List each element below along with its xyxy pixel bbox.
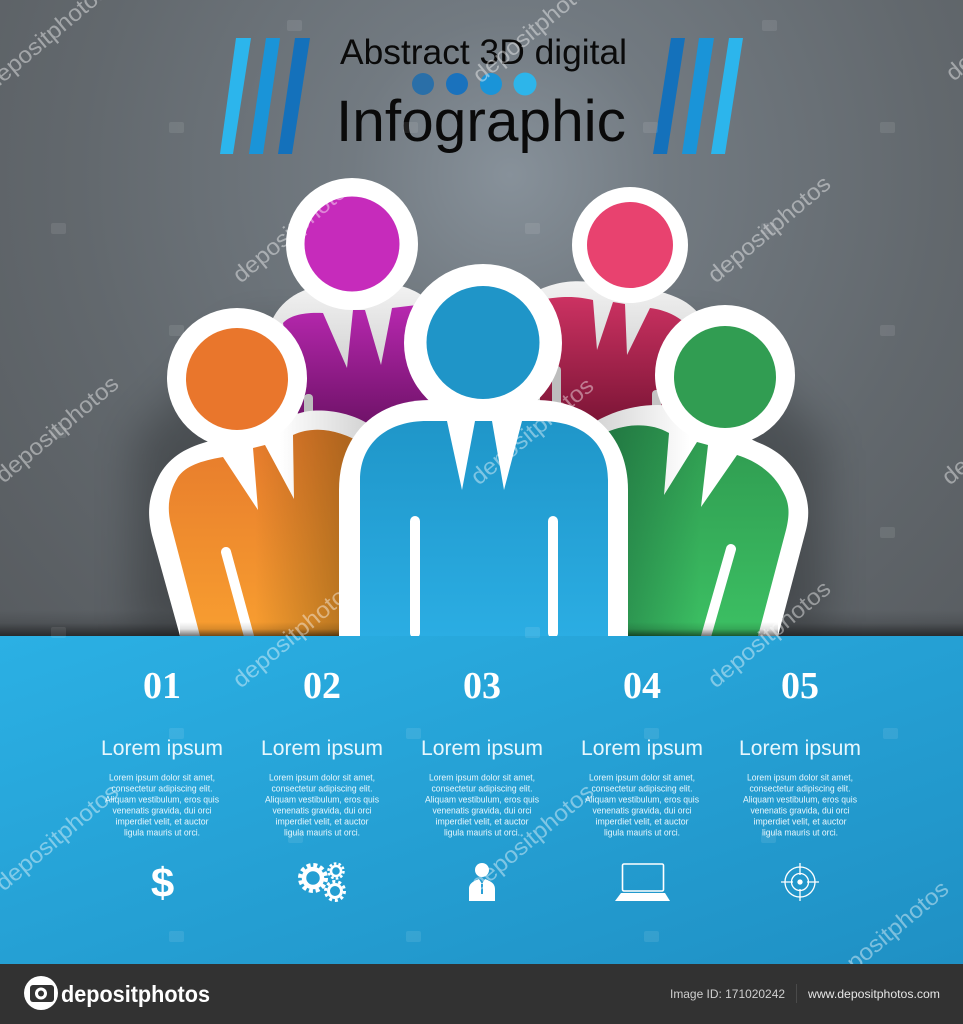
watermark text: depositphotos [227,170,360,288]
column 03: Lorem ipsum dolor sit amet, [429,772,535,784]
heading: right stripes [653,38,743,154]
four dots [412,72,536,96]
column 03: venenatis gravida, dui orci [432,806,532,816]
floor shadow [0,610,963,636]
blue info panel [0,636,963,964]
column 02: Aliquam vestibulum, eros quis [265,794,379,806]
column 05: imperdiet velit, et auctor [754,816,847,828]
column 03: ligula mauris ut orci. [444,828,520,838]
column 01: Lorem ipsum [101,737,223,760]
watermark camera marks [51,20,898,942]
column 05: Lorem ipsum [739,737,861,760]
column 03: Lorem ipsum [421,737,543,760]
column 04: Aliquam vestibulum, eros quis [585,794,699,806]
column 01: imperdiet velit, et auctor [116,816,209,828]
column 02: Lorem ipsum dolor sit amet, [269,772,375,784]
column 01: venenatis gravida, dui orci [112,806,212,816]
column 05 [739,665,861,838]
column 05: 05 [781,665,819,707]
watermark text: depositphotos [465,778,598,896]
column 04: venenatis gravida, dui orci [592,806,692,816]
heading: left stripes [220,38,310,154]
body base shadow [180,622,778,636]
column 04: Lorem ipsum [581,737,703,760]
people shadow [135,330,825,636]
column 02: imperdiet velit, et auctor [276,816,369,828]
column 04: ligula mauris ut orci. [604,828,680,838]
column 05: ligula mauris ut orci. [762,828,838,838]
watermark text: depositphotos [702,170,835,288]
column 01: consectetur adipiscing elit. [112,784,212,794]
column 01: 01 [143,665,181,707]
person: orange [149,308,375,640]
column 01 [101,665,223,838]
column 04: consectetur adipiscing elit. [592,784,692,794]
column 04: imperdiet velit, et auctor [596,816,689,828]
column 02: 02 [303,665,341,707]
person: green [590,305,808,640]
footer logo wordmark: depositphotos [61,981,210,1007]
background [0,0,963,636]
watermark text: depositphotos [820,875,953,993]
column 04 [581,665,703,838]
column 03: 03 [463,665,501,707]
column 02: consectetur adipiscing elit. [272,784,372,794]
image id: Image ID: 171020242 [670,987,785,1001]
column 04: 04 [623,665,661,707]
column 03 [421,665,543,838]
person: crimson [530,187,700,425]
icon: gears [300,864,344,900]
title line 2: Infographic [336,89,626,154]
column 05: consectetur adipiscing elit. [750,784,850,794]
column 03: imperdiet velit, et auctor [436,816,529,828]
icon: businessman [469,863,495,901]
column 05: Lorem ipsum dolor sit amet, [747,772,853,784]
footer logo icon [24,976,58,1010]
column 02 [261,665,383,838]
column 05: Aliquam vestibulum, eros quis [743,794,857,806]
icon: laptop [615,864,670,901]
person: purple [268,178,440,425]
watermark text: depositphotos [465,372,598,490]
column 01: Aliquam vestibulum, eros quis [105,794,219,806]
column 01: ligula mauris ut orci. [124,828,200,838]
column 01: Lorem ipsum dolor sit amet, [109,772,215,784]
column 04: Lorem ipsum dolor sit amet, [589,772,695,784]
footer bar [0,964,963,1024]
icon: dollar: $ [151,859,174,906]
column 05: venenatis gravida, dui orci [750,806,850,816]
icon: target [781,863,819,901]
column 03: consectetur adipiscing elit. [432,784,532,794]
person: blue [339,264,628,638]
column 02: Lorem ipsum [261,737,383,760]
website: www.depositphotos.com [807,987,940,1001]
column 02: ligula mauris ut orci. [284,828,360,838]
column 02: venenatis gravida, dui orci [272,806,372,816]
title line 1: Abstract 3D digital [340,33,627,72]
watermark text: depositphotos [227,575,360,693]
watermark text: depositphotos [702,575,835,693]
column 03: Aliquam vestibulum, eros quis [425,794,539,806]
